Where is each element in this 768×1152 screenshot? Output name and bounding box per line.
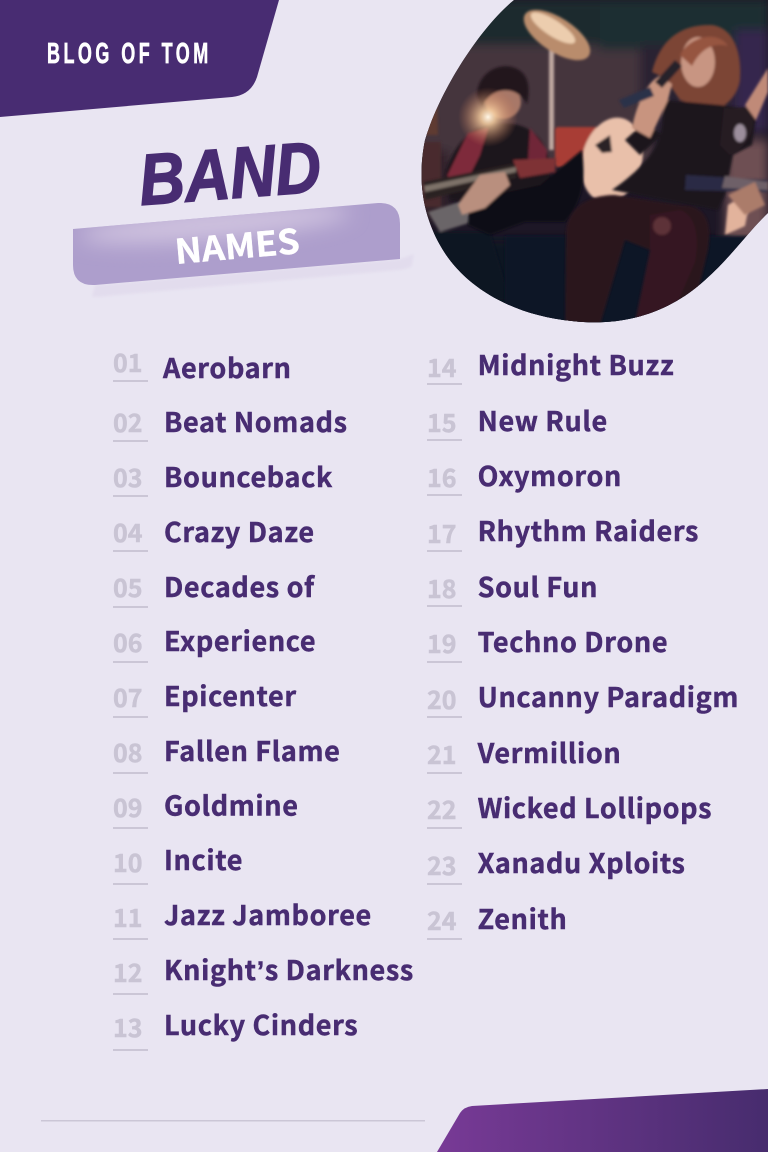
item 06: Experience [164,620,316,659]
item 04: Crazy Daze [164,511,315,550]
item 21: 21 [427,736,457,772]
item 11 [113,894,372,940]
item 13 [113,1004,358,1051]
stage flare [458,87,518,147]
item 09 [113,784,299,829]
item 24: 24 [427,902,457,938]
item 19: 19 [427,625,457,661]
item 17: 17 [427,515,457,551]
item 03: 03 [113,459,143,495]
stage backdrop [415,0,768,330]
item 20: Uncanny Paradigm [478,676,739,715]
item 17: Rhythm Raiders [478,510,699,549]
item 05: 05 [113,569,143,605]
item 12: Knight’s Darkness [164,949,414,988]
title: band: BAND [136,128,324,221]
item 24: Zenith [478,898,567,937]
item 15: 15 [427,404,457,440]
footer divider line [41,1120,425,1122]
item 23: 23 [427,847,457,883]
brand name: BLOG OF TOM [47,38,208,70]
item 16: Oxymoron [478,455,622,494]
item 18 [427,566,598,607]
cymbal [522,8,592,152]
item 13: 13 [113,1009,143,1045]
item 02: 02 [113,404,143,440]
item 21 [427,732,621,774]
item 14: 14 [427,349,457,385]
item 01: 01 [113,344,143,380]
item 05 [113,566,315,608]
item 04: 04 [113,514,143,550]
item 01: Aerobarn [162,347,292,386]
item 13: Lucky Cinders [164,1004,358,1043]
list: names 14 to 24 [427,344,739,940]
item 23: Xanadu Xploits [478,842,686,881]
item 14: Midnight Buzz [478,344,674,383]
item 05: Decades of [164,566,315,605]
item 22: 22 [427,791,457,827]
item 10: Incite [164,839,243,878]
item 06: 06 [113,624,143,660]
item 09: 09 [113,789,143,825]
item 19: Techno Drone [478,621,668,660]
item 24 [427,898,567,940]
item 07: Epicenter [164,675,297,714]
item 18: 18 [427,570,457,606]
item 18: Soul Fun [478,566,598,605]
list: names 01 to 13 [113,344,414,1051]
item 11: Jazz Jamboree [164,894,372,933]
item 10: 10 [113,844,143,880]
item 08: 08 [113,734,143,770]
left bassist edge [422,107,500,301]
item 03: Bounceback [164,456,333,495]
item 21: Vermillion [477,732,621,771]
header banner: blog of tom [0,0,279,117]
guitarist [424,66,583,235]
item 01 [113,344,292,386]
item 08 [113,730,341,774]
item 16: 16 [427,459,457,495]
item 15: New Rule [478,400,608,439]
title ribbon: names [73,197,414,297]
item 07 [113,675,297,718]
ribbon label: NAMES [173,214,301,274]
footer corner banner [437,1089,768,1152]
photo: band on stage in blob mask [415,0,768,331]
item 22: Wicked Lollipops [478,787,712,826]
item 02: Beat Nomads [164,401,348,440]
item 15 [427,400,608,441]
item 06 [113,620,316,663]
item 10 [113,839,243,885]
drums [555,111,752,235]
stage platform [504,234,748,322]
item 12: 12 [113,954,143,990]
item 07: 07 [113,679,143,715]
singer [565,25,768,325]
item 11: 11 [113,899,143,935]
item 08: Fallen Flame [164,730,341,769]
item 20: 20 [427,681,457,717]
item 09: Goldmine [164,784,299,824]
